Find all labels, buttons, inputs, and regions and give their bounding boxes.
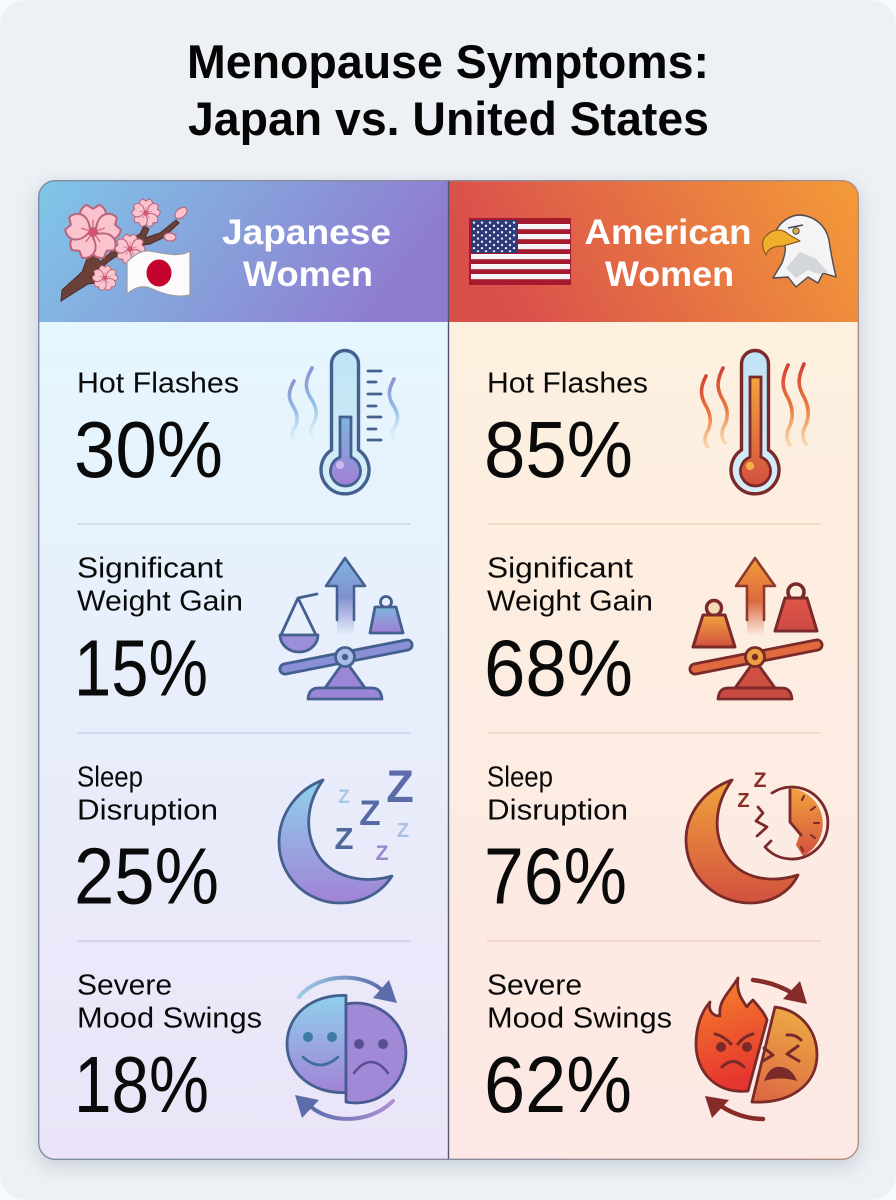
row 4 right: Severe Mood Swings 62%: Severe xyxy=(487,970,582,1002)
row 1 left: Hot Flashes 30%: 30% xyxy=(74,405,223,494)
row 2 left: Significant Weight Gain 15%: Weight Gain xyxy=(77,586,243,618)
icon: moon with Z letters: Z xyxy=(397,820,409,842)
icon: moon with broken clock xyxy=(686,769,828,903)
row 2 right: Significant Weight Gain 68%: 68% xyxy=(484,624,633,712)
icon: moon with Z letters: Z xyxy=(335,821,354,856)
icon: cool thermometer xyxy=(289,350,398,494)
row 2 left: Significant Weight Gain 15%: Significant xyxy=(77,552,223,584)
icon: balance with rising arrow, warm xyxy=(690,558,822,699)
icon: hot thermometer xyxy=(702,350,808,494)
icon: angry flame and upset face with arrows xyxy=(696,978,817,1119)
row 4 right: Severe Mood Swings 62%: 62% xyxy=(484,1040,632,1129)
icon: moon with Z letters: Z xyxy=(376,842,389,865)
icon: Japanese flag xyxy=(127,251,190,296)
row 3 right: Sleep Disruption 76%: Disruption xyxy=(487,794,628,826)
title xyxy=(187,35,709,145)
icon: balance with rising arrow, cool xyxy=(280,558,412,699)
heading: Japanese Women xyxy=(222,213,391,294)
heading: American Women xyxy=(584,213,752,294)
header: Japanese women band xyxy=(38,180,449,322)
row 1 left: Hot Flashes 30% xyxy=(74,368,239,494)
row 4 left: Severe Mood Swings 18%: Severe xyxy=(77,970,172,1002)
icon: moon with Z letters: Z xyxy=(386,761,414,812)
title: Japan vs. United States xyxy=(188,92,709,145)
icon: American flag xyxy=(469,218,571,285)
heading: American Women: Women xyxy=(605,255,734,294)
icon: moon with Z letters: Z xyxy=(338,787,350,808)
row 2 right: Significant Weight Gain 68% xyxy=(484,552,653,712)
row 4 left: Severe Mood Swings 18%: Mood Swings xyxy=(77,1002,262,1034)
row 3 left: Sleep Disruption 25%: Sleep xyxy=(77,762,143,794)
heading: American Women: American xyxy=(584,213,752,252)
heading: Japanese Women: Japanese xyxy=(222,213,391,252)
row 1 right: Hot Flashes 85%: Hot Flashes xyxy=(487,368,648,400)
row 4 right: Severe Mood Swings 62% xyxy=(484,970,672,1129)
row 1 right: Hot Flashes 85% xyxy=(484,368,648,494)
row 1 left: Hot Flashes 30%: Hot Flashes xyxy=(77,368,239,400)
row 2 left: Significant Weight Gain 15%: 15% xyxy=(74,624,208,712)
panel: American women body xyxy=(449,322,859,1160)
icon: moon with broken clock: Z xyxy=(754,769,767,792)
title: Menopause Symptoms: xyxy=(187,35,709,88)
heading: Japanese Women: Women xyxy=(243,255,373,294)
icon: split happy and sad face with arrows xyxy=(287,978,406,1119)
row 3 left: Sleep Disruption 25%: Disruption xyxy=(77,794,218,826)
row 2 right: Significant Weight Gain 68%: Weight Gain xyxy=(487,586,653,618)
icon: bald eagle xyxy=(763,215,836,287)
row 3 left: Sleep Disruption 25%: 25% xyxy=(74,832,219,920)
row 2 left: Significant Weight Gain 15% xyxy=(74,552,243,712)
row 1 right: Hot Flashes 85%: 85% xyxy=(484,405,633,494)
row 2 right: Significant Weight Gain 68%: Significant xyxy=(487,552,633,584)
panel: comparison card xyxy=(38,180,859,1160)
row 3 right: Sleep Disruption 76%: Sleep xyxy=(487,762,553,794)
panel: Japanese women body xyxy=(38,322,449,1160)
row 4 right: Severe Mood Swings 62%: Mood Swings xyxy=(487,1002,672,1034)
icon: moon with Z letters: Z xyxy=(359,794,381,833)
row 3 right: Sleep Disruption 76%: 76% xyxy=(484,832,627,920)
icon: moon with Z letters xyxy=(279,761,414,903)
row 4 left: Severe Mood Swings 18% xyxy=(74,970,262,1129)
icon: moon with broken clock: Z xyxy=(737,790,750,812)
icon: cherry blossom branch xyxy=(61,199,189,301)
row 3 right: Sleep Disruption 76% xyxy=(484,762,628,920)
row 3 left: Sleep Disruption 25% xyxy=(74,762,219,920)
row 4 left: Severe Mood Swings 18%: 18% xyxy=(74,1040,209,1129)
header: American women band xyxy=(449,180,859,322)
